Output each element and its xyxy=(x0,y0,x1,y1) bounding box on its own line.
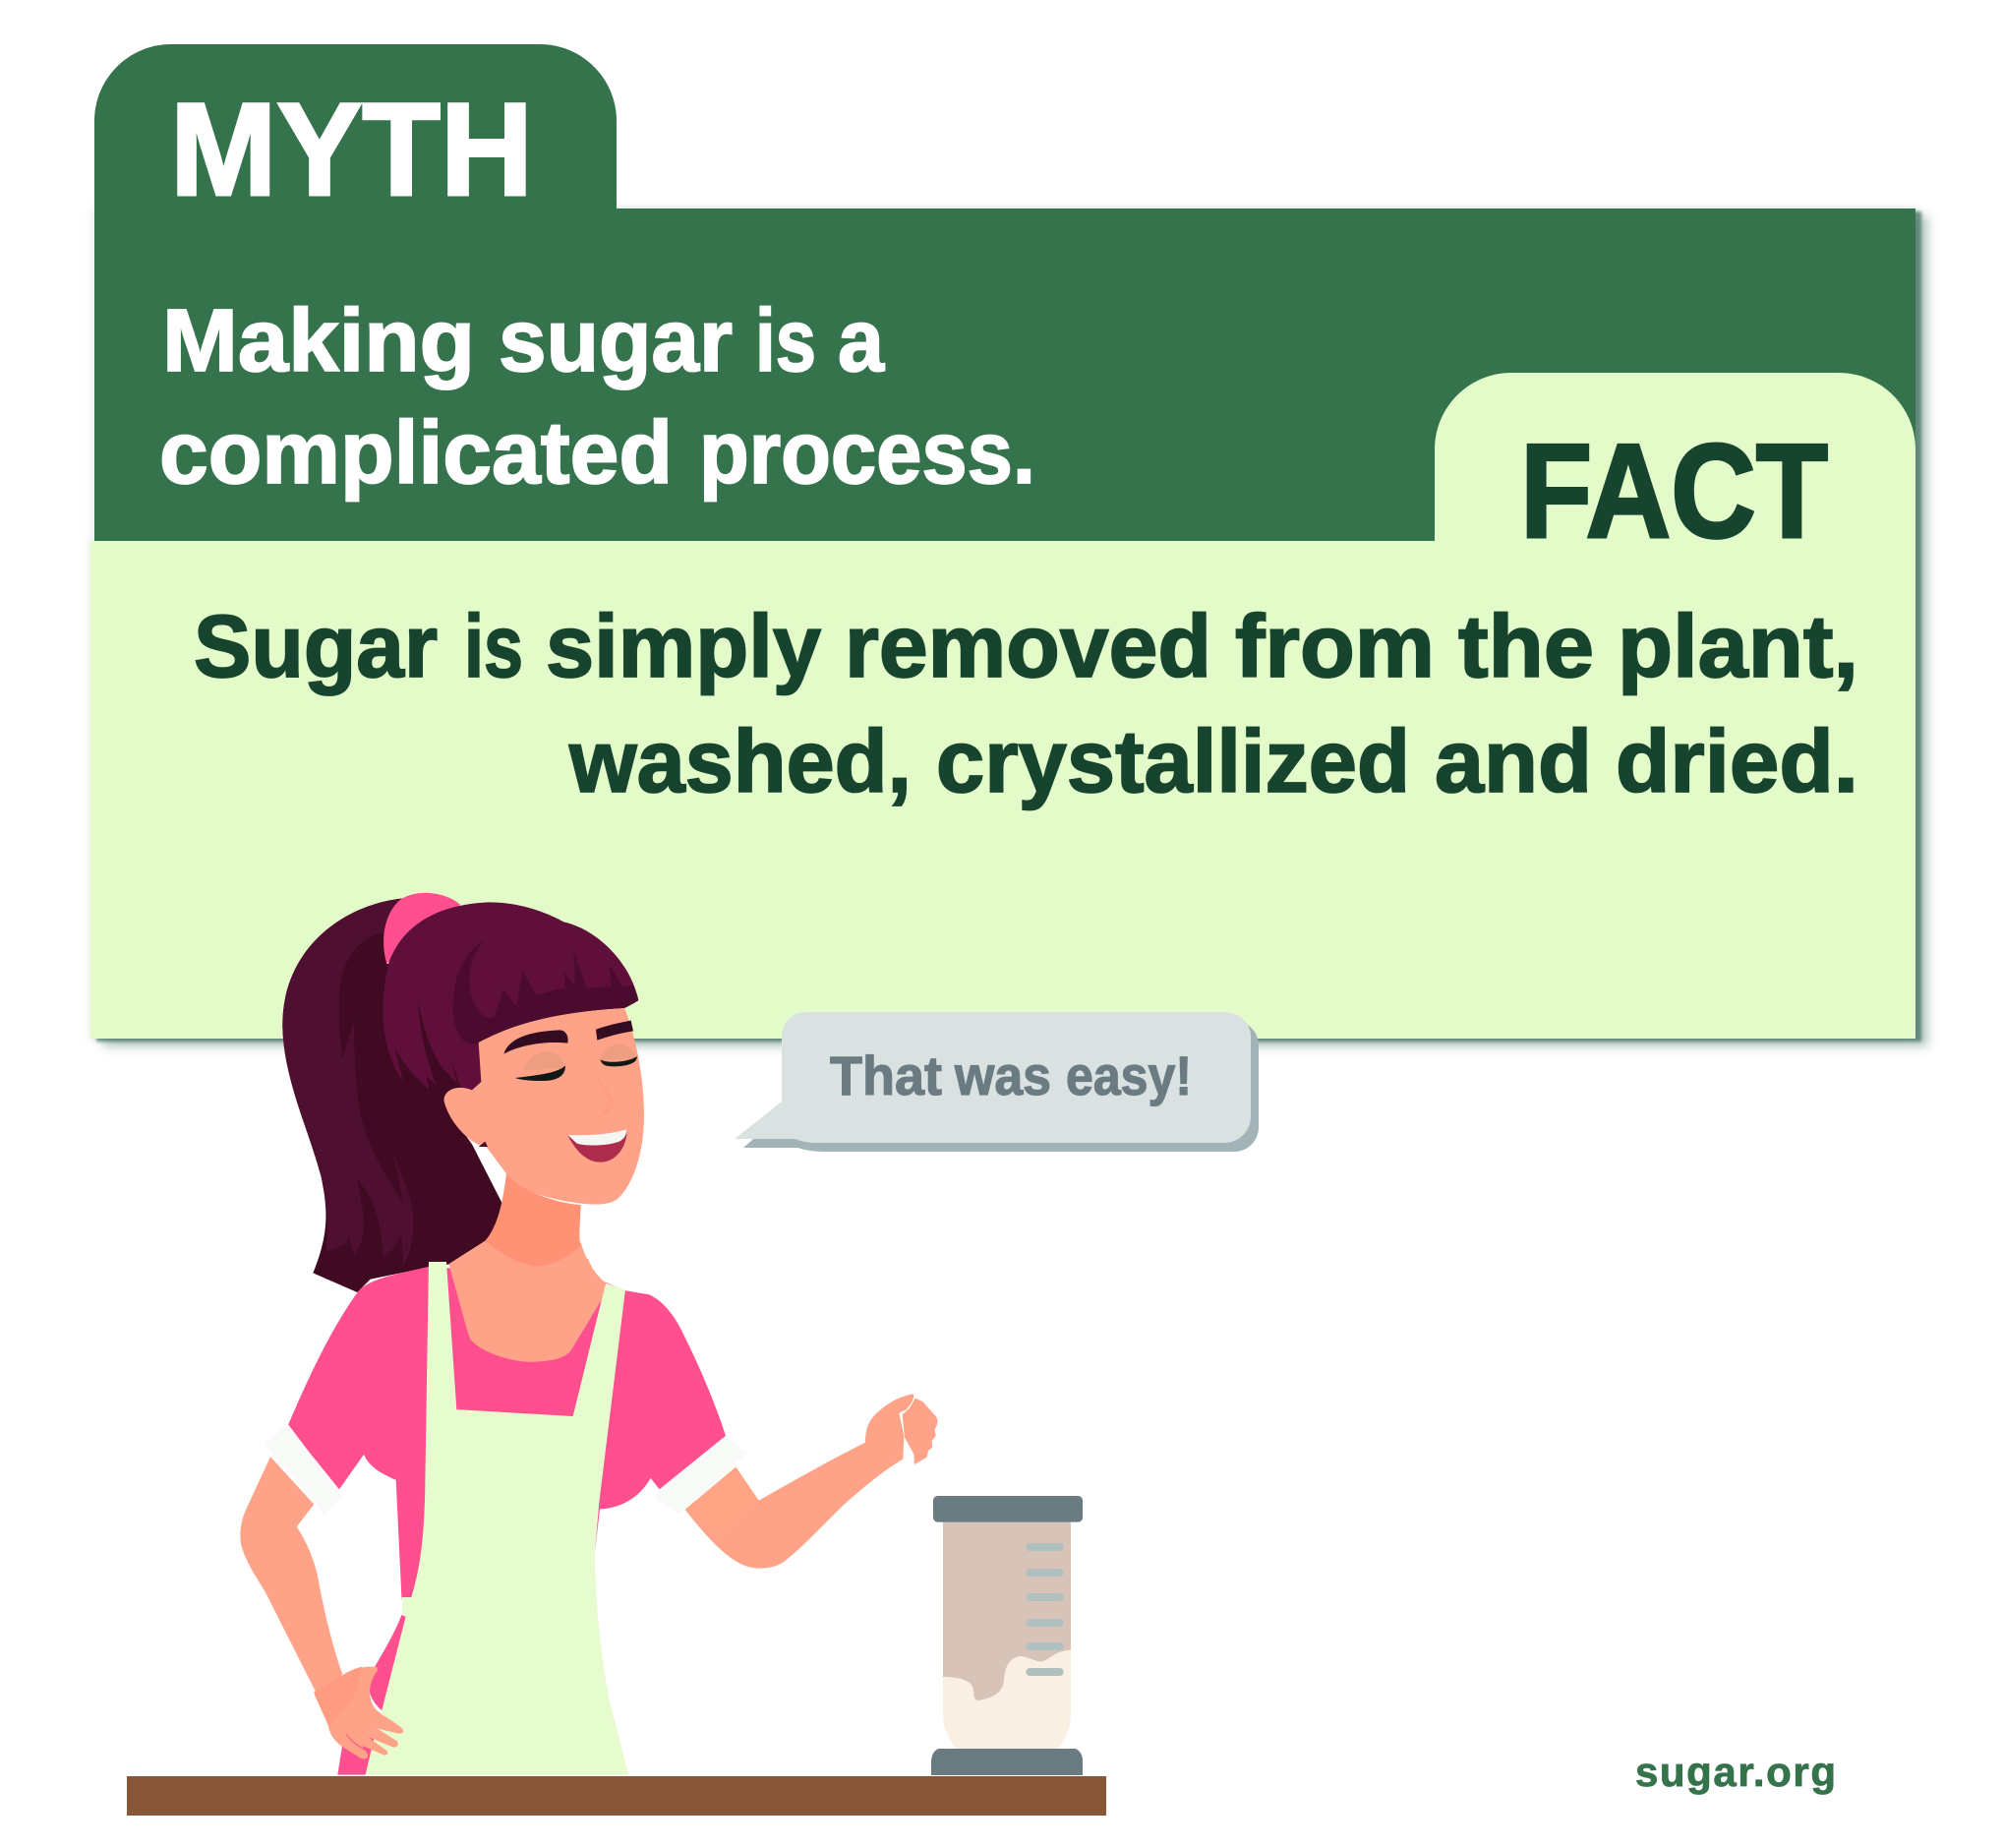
eyelids xyxy=(523,1043,636,1070)
panel: fact xyxy=(90,373,1915,1039)
jar lid xyxy=(933,1496,1083,1522)
fact statement: simply xyxy=(546,598,821,696)
fact statement: dried. xyxy=(1616,713,1858,811)
heading: MYTH: MYTH xyxy=(170,77,533,223)
panel: myth xyxy=(94,44,1915,541)
bubble text: That xyxy=(830,1044,942,1106)
right arm xyxy=(685,1394,938,1569)
fact statement xyxy=(194,598,1858,811)
left hand xyxy=(314,1667,403,1759)
eyebrows xyxy=(503,1021,633,1054)
head xyxy=(383,902,644,1291)
table xyxy=(127,1776,1106,1816)
torso and left arm xyxy=(240,1259,747,1775)
nose xyxy=(588,1062,615,1118)
bubble text xyxy=(830,1044,1192,1106)
fact statement: washed, xyxy=(568,713,912,811)
myth tab xyxy=(94,44,617,216)
myth statement: process. xyxy=(699,404,1035,503)
jar base xyxy=(931,1749,1083,1775)
fact statement: and xyxy=(1435,713,1592,811)
myth statement: a xyxy=(838,292,885,390)
measure marks xyxy=(1026,1543,1064,1676)
fact statement: Sugar xyxy=(194,598,438,696)
teeth xyxy=(567,1129,626,1146)
myth statement: complicated xyxy=(159,404,673,503)
panel: card base with shadow xyxy=(90,209,1915,1039)
fact body xyxy=(90,541,1915,1039)
bubble text: easy! xyxy=(1066,1044,1192,1106)
fact statement: is xyxy=(464,598,523,696)
fact statement: the xyxy=(1458,598,1594,696)
speech bubble xyxy=(735,1012,1259,1152)
fact statement: removed xyxy=(845,598,1211,696)
myth statement: is xyxy=(755,292,816,390)
fact statement: plant, xyxy=(1618,598,1858,696)
jar contents xyxy=(943,1650,1071,1751)
icon: blender jar xyxy=(931,1496,1083,1775)
heading: FACT: FACT xyxy=(1520,416,1828,566)
mouth xyxy=(567,1129,626,1162)
illustration: woman xyxy=(240,893,938,1775)
website: sugar.org xyxy=(1635,1749,1836,1795)
fact statement: from xyxy=(1235,598,1435,696)
fact statement: crystallized xyxy=(936,713,1410,811)
myth statement: sugar xyxy=(499,292,733,390)
myth statement xyxy=(159,292,1035,503)
jar glass xyxy=(943,1521,1071,1704)
ponytail xyxy=(282,893,502,1292)
myth statement: Making xyxy=(162,292,475,390)
bubble text: was xyxy=(954,1044,1051,1106)
bubble body xyxy=(735,1012,1251,1143)
myth body xyxy=(94,209,1915,541)
eyelashes xyxy=(515,1056,637,1081)
fact tab xyxy=(1435,373,1915,551)
bubble shadow xyxy=(743,1021,1259,1152)
